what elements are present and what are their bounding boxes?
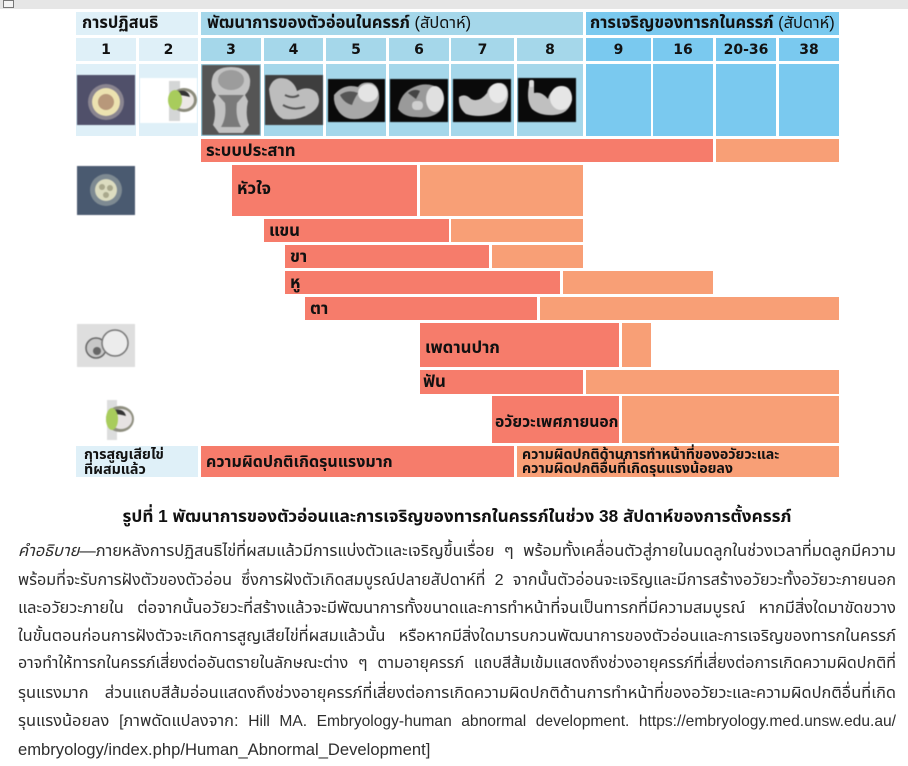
image row backgrounds [76, 64, 839, 136]
legend: functional and minor abnormality: ความผิดปกติอื่นที่เกิดรุนแรงน้อยลง [522, 461, 733, 477]
bar: ear [285, 271, 560, 294]
bar: heart minor [420, 165, 583, 216]
week 3 [201, 38, 261, 61]
heading: embryo development [201, 12, 583, 35]
image: week 4 embryo [264, 74, 324, 126]
bar: arm minor [451, 219, 583, 242]
caption text: ในขั้นตอนก่อนการฝังตัวจะเกิดการสูญเสียไข่ที่ผสมแล้วนั้น หรือหากมีสิ่งใดมารบกวนพัฒนาการของตัวอ่อนและการเจริญของทารกในครรภ์ [18, 627, 896, 645]
bar: eye minor [540, 297, 839, 320]
bar: leg minor [492, 245, 583, 268]
window toolbar strip [0, 0, 908, 9]
bar: external genitalia minor [622, 396, 839, 443]
week 2: 2 [164, 42, 173, 58]
bar: nervous system minor [716, 139, 839, 162]
caption text [18, 539, 896, 759]
week 1: 1 [101, 42, 111, 58]
week 7: 7 [478, 42, 487, 58]
legend: functional and minor abnormality: ความผิดปกติด้านการทำหน้าที่ของอวัยวะและ [522, 447, 779, 463]
bar: palate minor [622, 323, 651, 367]
week 4 [264, 38, 323, 61]
bar: ear minor [563, 271, 713, 294]
week 38: 38 [799, 42, 819, 58]
week 20-36 [716, 38, 776, 61]
figure title: รูปที่ 1 พัฒนาการของตัวอ่อนและการเจริญของทารกในครรภ์ในช่วง 38 สัปดาห์ของการตั้งครรภ์ [123, 506, 791, 526]
legend: loss of fertilised egg: การสูญเสียไข่ [84, 447, 164, 463]
image: week 5 embryo [327, 78, 386, 123]
week 3: 3 [226, 42, 236, 58]
week 20-36: 20-36 [724, 42, 768, 58]
bar: leg: ขา [290, 247, 307, 266]
caption text: และอวัยวะภายใน ต่อจากนั้นอวัยวะที่สร้างแล้วจะมีพัฒนาการทั้งขนาดและการทำหน้าที่จนเป็นทารกที่มีความสมบูรณ์ หากมีสิ่งใดมาขัดขวาง [18, 599, 896, 617]
image: implanted blastocyst [105, 400, 135, 440]
week 6: 6 [414, 42, 424, 58]
bar: arm [264, 219, 449, 242]
caption text: พร้อมที่จะรับการฝังตัวของตัวอ่อน ซึ่งการฝังตัวเกิดสมบูรณ์ปลายสัปดาห์ที่ 2 จากนั้นตัวอ่อนจะเจริญและมีการสร้างอวัยวะทั้งอวัยวะภายนอก [18, 571, 896, 589]
bar: external genitalia: อวัยวะเพศภายนอก [495, 414, 618, 431]
week 1 [76, 38, 136, 61]
heading: fertilisation: การปฏิสนธิ [82, 14, 158, 32]
image: week 6 embryo [389, 78, 449, 123]
bar: external genitalia [492, 396, 619, 443]
week 9 [586, 38, 651, 61]
bar: eye: ตา [310, 299, 328, 318]
bar: teeth minor [586, 370, 839, 394]
week 7 [451, 38, 514, 61]
week 8: 8 [545, 42, 555, 58]
image: week 7 embryo [452, 78, 512, 123]
caption text: รุนแรงมาก ส่วนแถบสีส้มอ่อนแสดงถึงช่วงอายุครรภ์ที่เสี่ยงต่อการเกิดความผิดปกติด้านการทำหน้าที่ของอวัยวะและความผิดปกติอื่นที่เกิด [18, 684, 896, 702]
week 4: 4 [289, 42, 298, 58]
caption text: คำอธิบาย—ภายหลังการปฏิสนธิไข่ที่ผสมแล้วมีการแบ่งตัวและเจริญขึ้นเรื่อย ๆ พร้อมทั้งเคลื่อนตัวสู่ภายในมดลูกในช่วงเวลาที่มดลูกมีความ [18, 542, 896, 560]
bar: ear: หู [290, 273, 300, 292]
legend: severe abnormality [201, 446, 514, 477]
legend: loss of fertilised egg: ที่ผสมแล้ว [84, 462, 146, 478]
image: week 8 embryo [517, 77, 577, 123]
bar: teeth: ฟัน [423, 372, 446, 391]
image: implanting blastocyst [140, 78, 198, 124]
week 8 [517, 38, 583, 61]
caption text: อาจทำให้ทารกในครรภ์เสี่ยงต่ออันตรายในลักษณะต่าง ๆ ตามอายุครรภ์ แถบสีส้มเข้มแสดงถึงช่วงอายุครรภ์ที่เสี่ยงต่อการเกิดความผิดปกติที่ [18, 655, 896, 672]
week 9: 9 [614, 42, 623, 58]
week 2 [139, 38, 198, 61]
bar: arm: แขน [269, 221, 300, 240]
caption text: embryology/index.php/Human_Abnormal_Development] [18, 740, 430, 759]
heading: fertilisation [76, 12, 198, 35]
week 38 [779, 38, 839, 61]
bar: teeth [420, 370, 583, 394]
week 6 [389, 38, 449, 61]
heading: fetal growth: การเจริญของทารกในครรภ์ (สัปดาห์) [590, 14, 835, 32]
chart: embryo development timeline [76, 12, 839, 478]
image: morula [76, 165, 136, 216]
toolbar icon [3, 0, 14, 8]
legend: severe abnormality: ความผิดปกติเกิดรุนแรงมาก [206, 454, 393, 471]
bar: heart [232, 165, 417, 216]
bar: palate: เพดานปาก [425, 338, 500, 357]
legend: loss of fertilised egg [76, 446, 198, 477]
bar: heart: หัวใจ [237, 179, 271, 198]
week 5 [326, 38, 386, 61]
caption text: รุนแรงน้อยลง [ภาพดัดแปลงจาก: Hill MA. Embryology-human abnormal development. https://embryology.med.unsw.edu.au/ [18, 712, 896, 730]
week 16: 16 [673, 42, 693, 58]
legend: functional and minor abnormality [517, 446, 839, 477]
week 5: 5 [351, 42, 361, 58]
bar: nervous system: ระบบประสาท [206, 141, 296, 160]
image: fertilised egg [76, 74, 136, 126]
heading: embryo development: พัฒนาการของตัวอ่อนในครรภ์ (สัปดาห์) [207, 14, 471, 32]
bar: palate [420, 323, 619, 367]
bar: eye [305, 297, 537, 320]
image: week 3 embryo [201, 64, 261, 136]
bar: nervous system [201, 139, 713, 162]
week 16 [653, 38, 713, 61]
bar: leg [285, 245, 489, 268]
image: blastocyst hatching [76, 324, 136, 368]
